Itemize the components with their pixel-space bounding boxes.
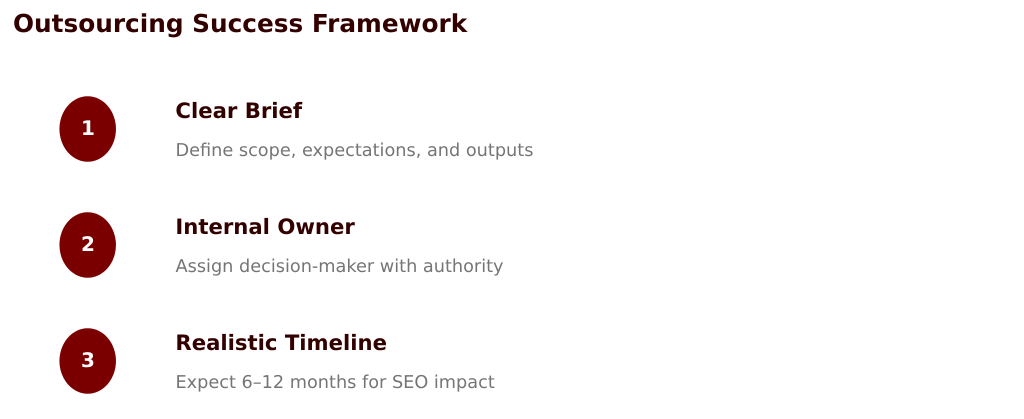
step 1 description: Define scope, expectations, and outputs (176, 141, 533, 161)
step 2 number badge: 2 (81, 232, 95, 256)
step 1: clear brief (59, 96, 533, 162)
step 3 heading: Realistic Timeline (175, 330, 387, 355)
step 3 description: Expect 6–12 months for SEO impact (176, 373, 495, 393)
step 2: internal owner (59, 212, 504, 278)
step 2 description: Assign decision-maker with authority (176, 257, 504, 277)
step 1 heading: Clear Brief (175, 98, 303, 123)
step 1 number badge: 1 (81, 116, 95, 140)
step 3 number badge: 3 (81, 348, 95, 372)
step 3: realistic timeline (59, 328, 495, 394)
title: Outsourcing Success Framework (13, 9, 468, 38)
step 1 number badge (59, 96, 116, 162)
step 3 number badge (59, 328, 116, 394)
step 2 number badge (59, 212, 116, 278)
step 2 heading: Internal Owner (175, 214, 355, 239)
